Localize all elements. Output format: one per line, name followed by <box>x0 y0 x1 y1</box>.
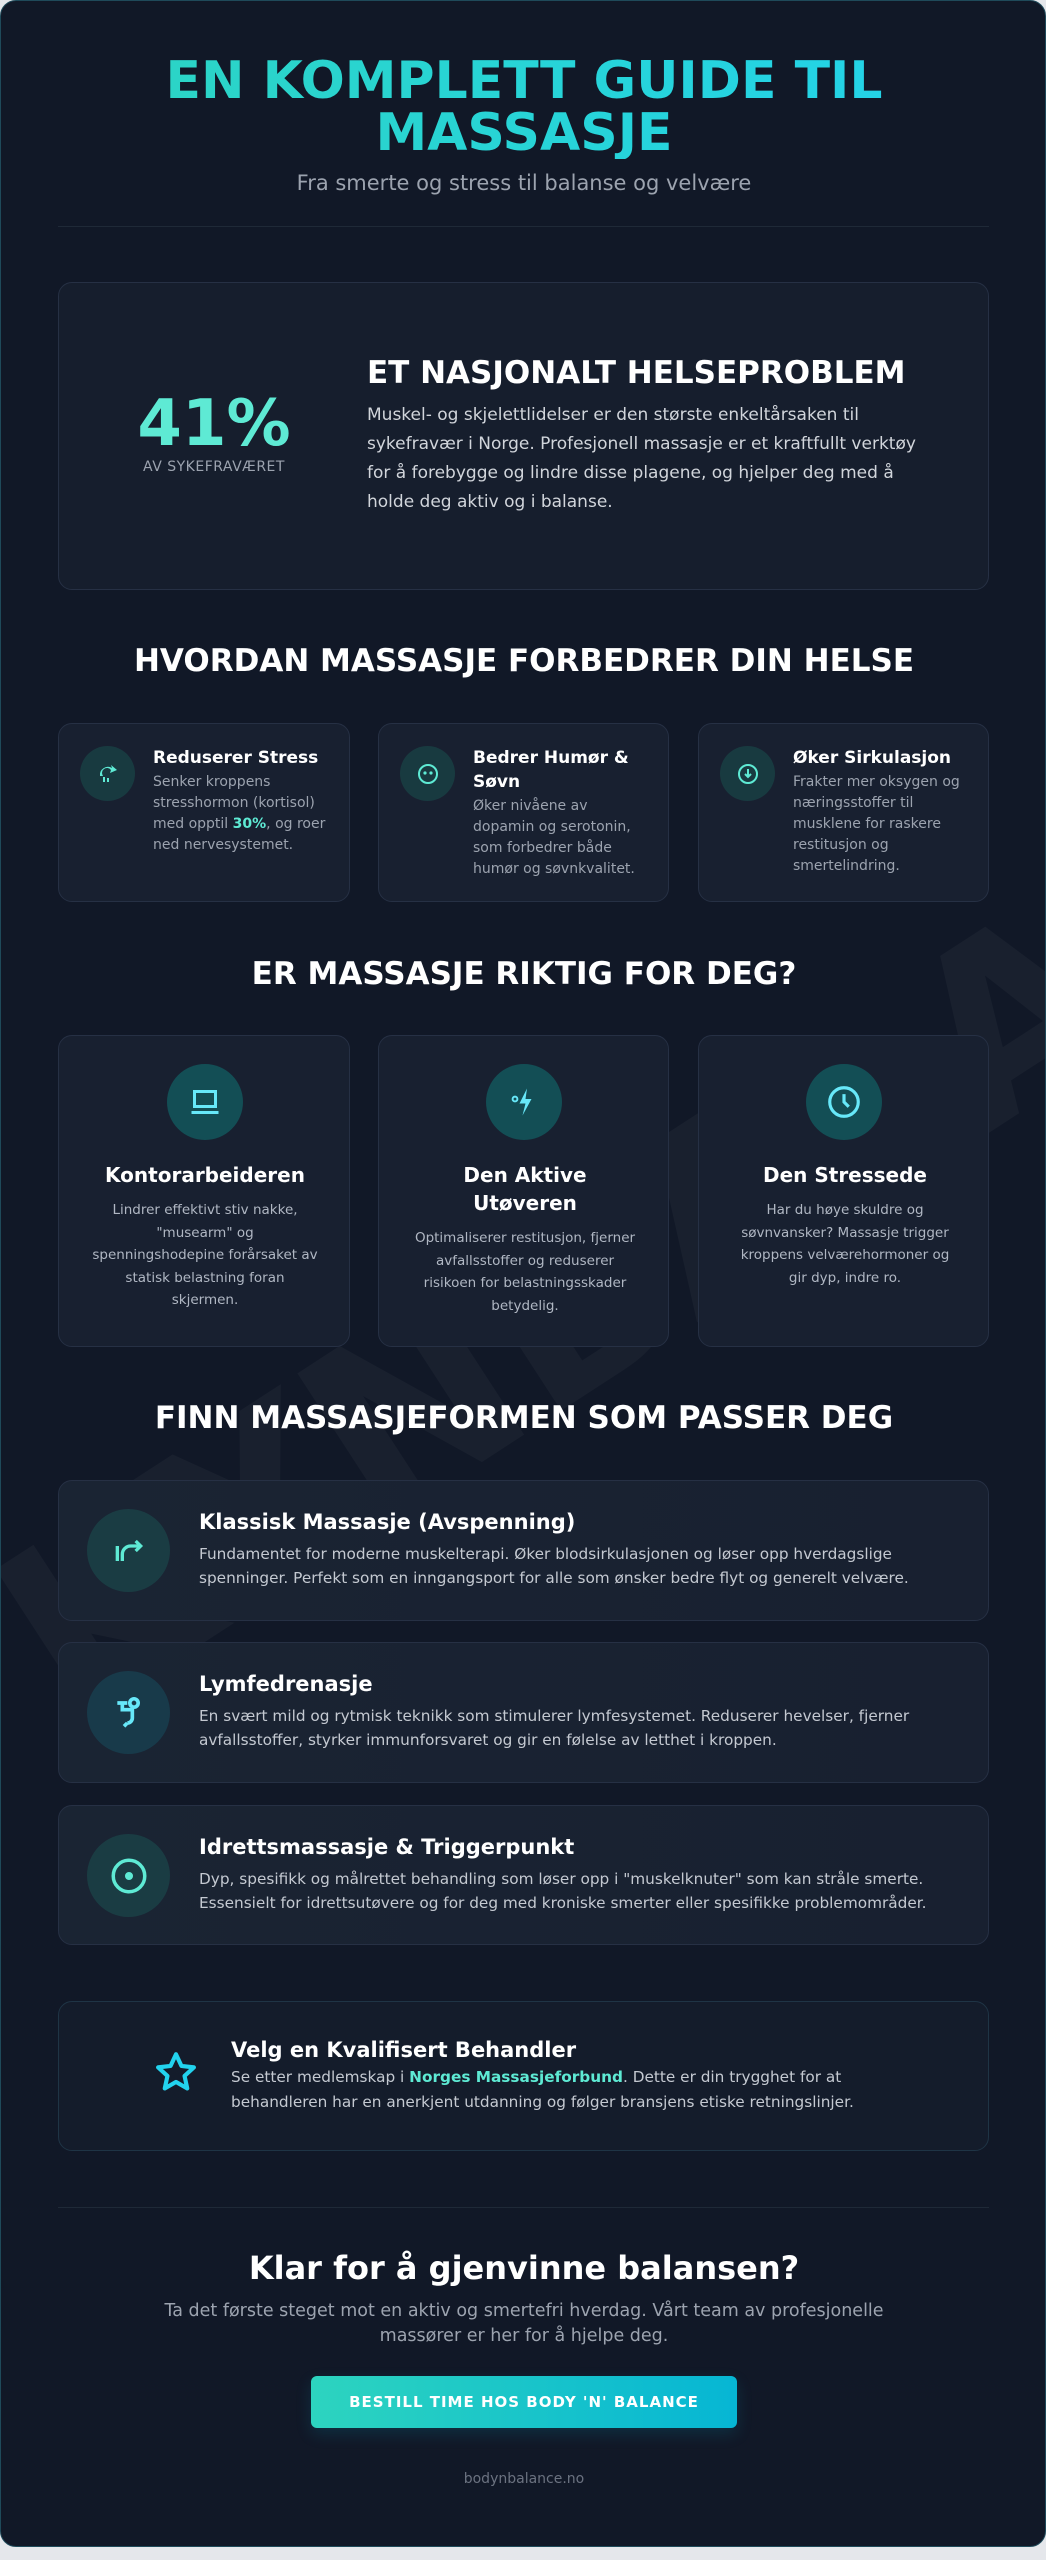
panel: stat <box>58 282 989 590</box>
callout: qualified therapist: Se etter medlemskap i Norges Massasjeforbund. Dette er din trygghet for at behandleren har en anerkjent utdanning og følger bransjens etiske retningslinjer. <box>231 2068 854 2111</box>
card: stressed: Den Stressede <box>763 1163 927 1187</box>
card: sports: Idrettsmassasje & Triggerpunkt <box>199 1835 574 1859</box>
callout: qualified therapist <box>58 2001 989 2151</box>
panel: benefits <box>58 723 989 902</box>
icon: laptop <box>167 1064 243 1140</box>
card: stress: Senker kroppens stresshormon (kortisol) med opptil 30%, og roer ned nervesystemet. <box>153 774 325 853</box>
footer url: bodynbalance.no <box>464 2471 584 2487</box>
card: mood: Øker nivåene av dopamin og serotonin, som forbedrer både humør og søvnkvalitet. <box>473 798 635 877</box>
title: EN KOMPLETT GUIDE TIL <box>165 51 883 111</box>
icon: bolt <box>486 1064 562 1140</box>
card: classic: Fundamentet for moderne muskelterapi. Øker blodsirkulasjonen og løser opp hverdagslige spenninger. Perfekt som en inngangsport for alle som ønsker bedre flyt og generelt velvære. <box>199 1545 909 1587</box>
subtitle: Fra smerte og stress til balanse og velvære <box>297 171 751 195</box>
card: lymph <box>58 1642 989 1783</box>
card: athlete: Optimaliserer restitusjon, fjerner avfallsstoffer og reduserer risikoen for belastningsskader betydelig. <box>415 1230 635 1314</box>
heading: types: FINN MASSASJEFORMEN SOM PASSER DEG <box>155 1400 893 1436</box>
card: office: skjermen. <box>172 1292 238 1308</box>
card: office: "musearm" og <box>156 1224 254 1240</box>
card: office: Kontorarbeideren <box>105 1163 305 1187</box>
card: office: spenningshodepine forårsaket av <box>92 1247 318 1263</box>
card: office: Lindrer effektivt stiv nakke, <box>112 1202 298 1218</box>
card: office <box>58 1035 350 1347</box>
callout: qualified therapist: Velg en Kvalifisert Behandler <box>231 2038 576 2062</box>
stat heading and text: Muskel- og skjelettlidelser er den største enkeltårsaken til sykefravær i Norge. Profesjonell massasje er et kraftfullt verktøy for å forebygge og lindre disse plagene, og hjelper deg med å holde deg aktiv og i balanse. <box>367 405 916 512</box>
card: circulation: Øker Sirkulasjon <box>793 748 951 768</box>
icon: classic <box>87 1509 170 1592</box>
card: office: statisk belastning foran <box>125 1270 285 1286</box>
card: mood: Bedrer Humør & Søvn <box>473 748 629 792</box>
stat heading and text: ET NASJONALT HELSEPROBLEM <box>367 355 906 391</box>
title <box>1 55 1046 159</box>
button: book <box>311 2376 737 2428</box>
icon: clock <box>806 1064 882 1140</box>
button: book: BESTILL TIME HOS BODY 'N' BALANCE <box>349 2393 699 2411</box>
stat number: 41% <box>137 387 291 461</box>
title: MASSASJE <box>375 103 673 163</box>
card: athlete <box>378 1035 669 1347</box>
card: athlete: Den Aktive Utøveren <box>463 1163 587 1215</box>
icon: stress <box>80 746 135 801</box>
text: cta paragraph: Ta det første steget mot en aktiv og smertefri hverdag. Vårt team av profesjonelle massører er her for å hjelpe deg. <box>164 2301 884 2346</box>
card: lymph: Lymfedrenasje <box>199 1672 373 1696</box>
card: stress: Reduserer Stress <box>153 748 318 768</box>
icon: smile <box>400 746 455 801</box>
card: sports <box>58 1805 989 1945</box>
card: sports: Dyp, spesifikk og målrettet behandling som løser opp i "muskelknuter" som kan stråle smerte. Essensielt for idrettsutøvere og for deg med kroniske smerter eller spesifikke problemområder. <box>199 1870 927 1912</box>
icon: star <box>156 2052 196 2090</box>
icon: lymph <box>87 1671 170 1754</box>
icon: circulation <box>720 746 775 801</box>
card: mood <box>378 723 669 902</box>
heading: audience: ER MASSASJE RIKTIG FOR DEG? <box>252 956 796 992</box>
stat heading and text <box>367 355 916 512</box>
panel: audience <box>58 1035 989 1347</box>
heading: benefits: HVORDAN MASSASJE FORBEDRER DIN HELSE <box>134 643 914 679</box>
card: classic: Klassisk Massasje (Avspenning) <box>199 1510 575 1534</box>
stat number: AV SYKEFRAVÆRET <box>143 459 285 475</box>
card: stressed: Har du høye skuldre og søvnvansker? Massasje trigger kroppens velværehormoner og gir dyp, indre ro. <box>741 1202 949 1286</box>
card: stress <box>58 723 350 902</box>
card: classic <box>58 1480 989 1621</box>
card: circulation: Frakter mer oksygen og næringsstoffer til musklene for raskere restitusjon og smertelindring. <box>793 774 960 874</box>
heading: call to action: Klar for å gjenvinne balansen? <box>249 2249 799 2287</box>
card: stressed <box>698 1035 989 1347</box>
card: circulation <box>698 723 989 902</box>
icon: target <box>87 1834 170 1917</box>
card: lymph: En svært mild og rytmisk teknikk som stimulerer lymfesystemet. Reduserer hevelser, fjerner avfallsstoffer, styrker immunforsvaret og gir en følelse av letthet i kroppen. <box>199 1707 909 1749</box>
